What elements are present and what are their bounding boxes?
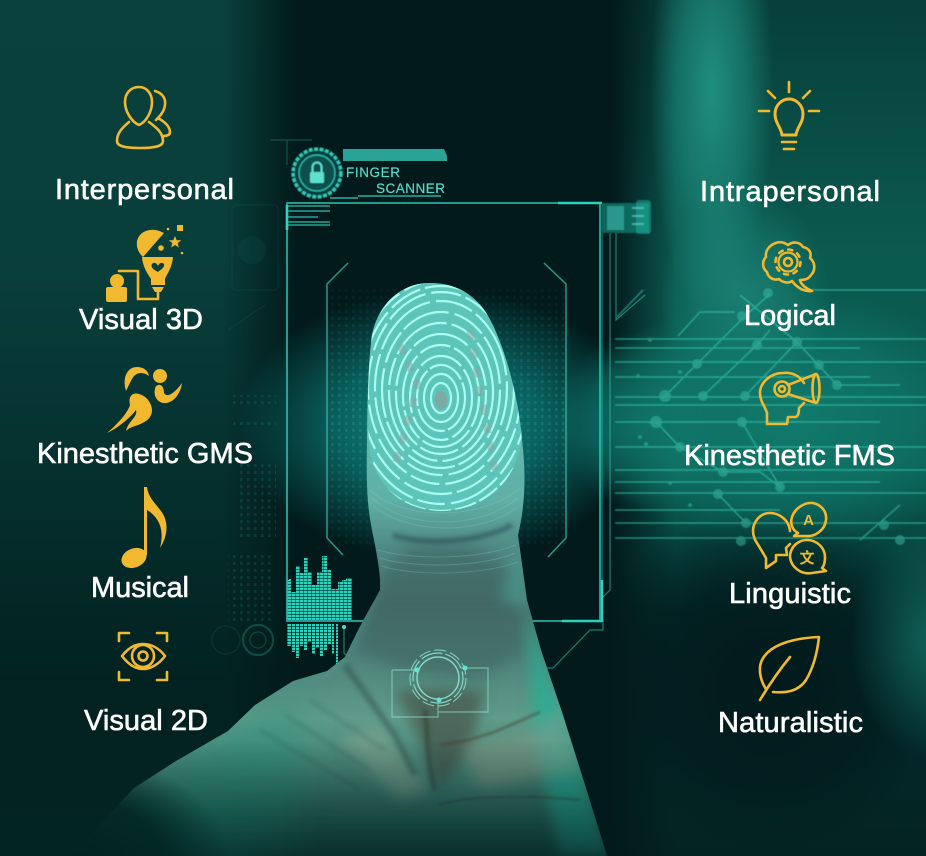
icon: light bulb bbox=[759, 82, 819, 149]
item: Kinesthetic GMS bbox=[37, 367, 253, 470]
item: Linguistic bbox=[729, 503, 851, 610]
item: Musical bbox=[91, 487, 189, 604]
icon: speaking head with translation bubbles: 文 bbox=[799, 547, 815, 568]
hand and thumb bbox=[118, 283, 607, 856]
label: Kinesthetic GMS bbox=[37, 438, 253, 470]
label: Logical bbox=[744, 300, 836, 332]
target ring bbox=[342, 625, 488, 717]
scanner title text bbox=[346, 165, 445, 196]
icon: speaking head with translation bubbles bbox=[753, 503, 826, 573]
item: Interpersonal bbox=[55, 87, 234, 206]
right document panel bbox=[601, 200, 651, 234]
icon: brain with gear bbox=[763, 242, 814, 291]
label: Visual 2D bbox=[84, 705, 208, 737]
label: Kinesthetic FMS bbox=[684, 440, 895, 472]
scanner title underline bbox=[330, 196, 441, 198]
icon: music note bbox=[118, 487, 166, 572]
icon: eye with focus brackets bbox=[119, 633, 167, 680]
finger ridge lines below print bbox=[370, 488, 520, 573]
fingerprint bbox=[368, 283, 522, 511]
faint HUD panels on the left bbox=[228, 205, 278, 625]
label: Visual 3D bbox=[79, 304, 203, 336]
scanner title bar bbox=[343, 149, 447, 161]
item: Logical bbox=[744, 242, 836, 332]
faint dial circles bbox=[212, 625, 273, 655]
icon: speaking head with translation bubbles: A bbox=[803, 512, 814, 529]
icon: head with megaphone bbox=[760, 373, 820, 424]
label: Intrapersonal bbox=[700, 176, 880, 208]
label: Musical bbox=[91, 572, 189, 604]
icon: people bbox=[117, 87, 170, 148]
hand shading bbox=[174, 522, 606, 856]
digital dot matrix inside scanner bbox=[328, 285, 566, 545]
icon: head with light bulb bbox=[106, 225, 183, 302]
item: Visual 3D bbox=[79, 225, 203, 336]
icon: leaf bbox=[760, 637, 819, 700]
label: Interpersonal bbox=[55, 174, 234, 206]
circuit board traces bbox=[615, 288, 926, 546]
scanner title text: SCANNER bbox=[376, 181, 445, 196]
item: Kinesthetic FMS bbox=[684, 373, 895, 472]
icon: runner bbox=[107, 367, 182, 433]
equalizer chart bbox=[287, 556, 352, 664]
item: Intrapersonal bbox=[700, 82, 880, 208]
label: Naturalistic bbox=[718, 707, 863, 739]
label: Linguistic bbox=[729, 578, 851, 610]
scanner title text: FINGER bbox=[346, 165, 400, 180]
item: Naturalistic bbox=[718, 637, 863, 739]
lock badge bbox=[293, 149, 341, 197]
item: Visual 2D bbox=[84, 633, 208, 737]
scanner header panel corner lines bbox=[288, 205, 330, 226]
scanner frame bbox=[270, 140, 645, 668]
